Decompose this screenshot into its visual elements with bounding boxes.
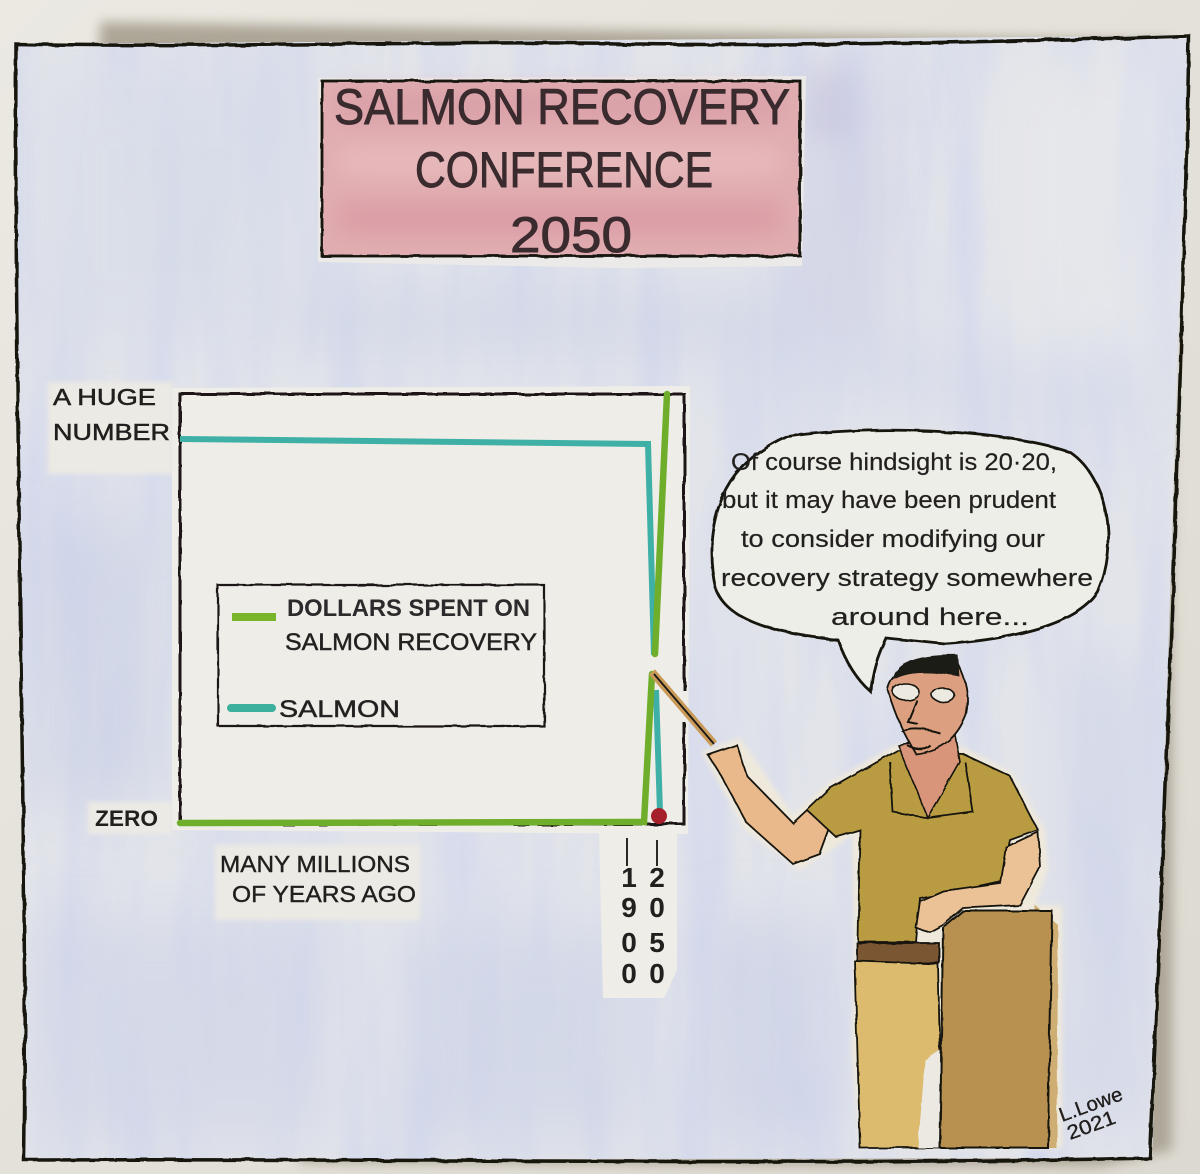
neck [898, 735, 960, 818]
y axis label: a huge number: NUMBER [53, 419, 170, 445]
legend: SALMON RECOVERY [285, 629, 537, 656]
x axis ticks: 1900 and 2050: 2 [649, 862, 665, 893]
salmon line [180, 439, 660, 812]
chart [48, 382, 690, 998]
title text: CONFERENCE [415, 142, 713, 198]
hair [893, 655, 960, 680]
dollars line [180, 394, 667, 823]
x axis ticks: 1900 and 2050 [599, 832, 677, 998]
x axis ticks: 1900 and 2050: 0 [649, 892, 665, 923]
chart paper [172, 386, 690, 834]
shirt [807, 750, 1038, 942]
speech text: Of course hindsight is 20·20, [731, 449, 1057, 476]
glasses [893, 684, 954, 702]
speech text [721, 449, 1093, 631]
speech text: recovery strategy somewhere [721, 565, 1093, 592]
title panel [318, 76, 806, 268]
speech bubble [711, 430, 1109, 692]
x axis label: many millions of years ago: OF YEARS AGO [232, 881, 416, 907]
figure halo [702, 738, 1062, 1148]
title text [334, 79, 790, 263]
right arm [916, 832, 1040, 932]
title text: 2050 [510, 207, 632, 263]
podium side wash [1035, 905, 1058, 1148]
speech text: but it may have been prudent [722, 487, 1056, 514]
collar [890, 762, 973, 818]
left arm [708, 745, 830, 864]
pointer [652, 672, 714, 744]
title text: SALMON RECOVERY [334, 79, 790, 135]
x axis label: many millions of years ago: MANY MILLIONS [220, 851, 410, 877]
signature: L.Lowe [1056, 1083, 1126, 1127]
nose and mouth [902, 700, 940, 749]
legend: DOLLARS SPENT ON [287, 595, 530, 622]
speech text: around here... [831, 604, 1029, 631]
legend: SALMON [279, 696, 400, 723]
x axis ticks: 1900 and 2050: 0 [621, 958, 637, 989]
signature [1056, 1083, 1126, 1145]
y axis label: zero [88, 802, 172, 834]
y axis label: zero: ZERO [95, 806, 158, 831]
presenter figure [652, 655, 1062, 1148]
signature: 2021 [1064, 1107, 1119, 1145]
y axis label: a huge number: A HUGE [53, 384, 156, 410]
legend [218, 585, 544, 726]
trouser leg gap [918, 1050, 942, 1148]
speech text: to consider modifying our [741, 526, 1045, 553]
head [888, 663, 968, 754]
trousers [855, 961, 942, 1148]
x axis ticks: 1900 and 2050: 5 [649, 927, 665, 958]
podium [940, 911, 1052, 1148]
y axis label: a huge number [48, 382, 173, 474]
belt [857, 943, 939, 963]
x axis ticks: 1900 and 2050: 0 [649, 958, 665, 989]
x axis ticks: 1900 and 2050: 9 [621, 892, 637, 923]
x axis label: many millions of years ago [215, 845, 420, 920]
x axis ticks: 1900 and 2050: 1 [621, 862, 637, 893]
red dot [651, 808, 667, 824]
x axis ticks: 1900 and 2050: 0 [621, 927, 637, 958]
